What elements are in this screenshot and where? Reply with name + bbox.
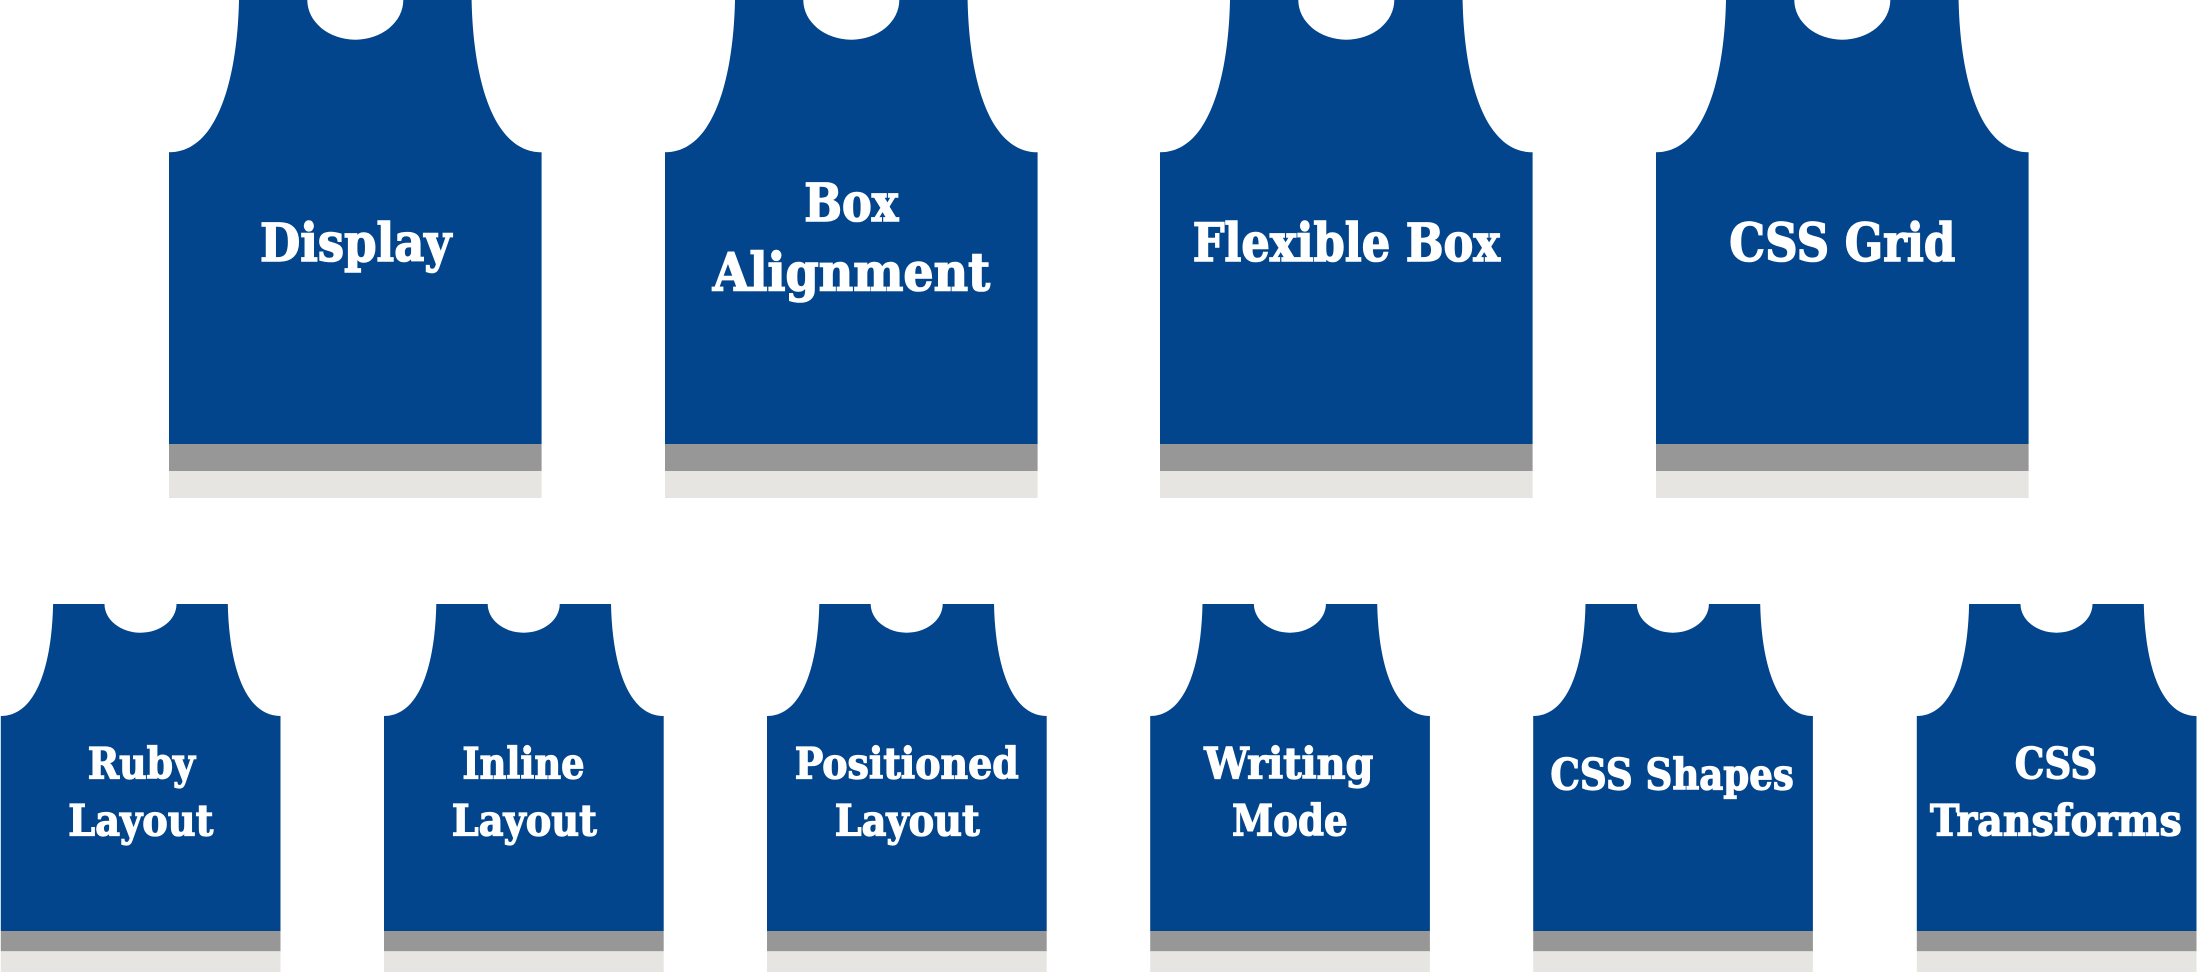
jersey: Positioned Layout xyxy=(767,604,1047,972)
jersey: Writing Mode xyxy=(1150,604,1430,972)
label: Box Alignment: Box xyxy=(804,173,899,234)
jersey: CSS Grid xyxy=(1656,0,2029,498)
label: Inline Layout xyxy=(452,738,597,846)
label: Ruby Layout: Layout xyxy=(68,796,213,846)
label: Inline Layout: Layout xyxy=(452,796,597,846)
label: Positioned Layout: Layout xyxy=(835,796,980,846)
label: CSS Transforms xyxy=(1930,738,2182,846)
label: CSS Shapes: CSS Shapes xyxy=(1550,749,1794,800)
label: Ruby Layout xyxy=(68,738,213,846)
jersey: Flexible Box xyxy=(1160,0,1533,498)
label: Writing Mode xyxy=(1203,738,1373,846)
label: Display: Display xyxy=(260,213,453,274)
label: Writing Mode: Mode xyxy=(1232,796,1348,846)
jersey: Inline Layout xyxy=(384,604,664,972)
jersey: Display xyxy=(169,0,542,498)
label: Ruby Layout: Ruby xyxy=(88,738,197,789)
label: Inline Layout: Inline xyxy=(462,738,584,789)
label: Positioned Layout: Positioned xyxy=(795,738,1019,789)
label: Writing Mode: Writing xyxy=(1203,738,1373,789)
label: CSS Transforms: CSS xyxy=(2015,738,2097,789)
label: Positioned Layout xyxy=(795,738,1019,846)
jersey: Ruby Layout xyxy=(1,604,281,972)
jersey: CSS Shapes xyxy=(1533,604,1813,972)
label: CSS Grid: CSS Grid xyxy=(1729,213,1955,274)
jersey: Box Alignment xyxy=(665,0,1038,498)
label: Box Alignment xyxy=(712,173,990,304)
label: Box Alignment: Alignment xyxy=(712,243,990,304)
jersey: CSS Transforms xyxy=(1917,604,2196,972)
label: Flexible Box: Flexible Box xyxy=(1193,213,1501,274)
